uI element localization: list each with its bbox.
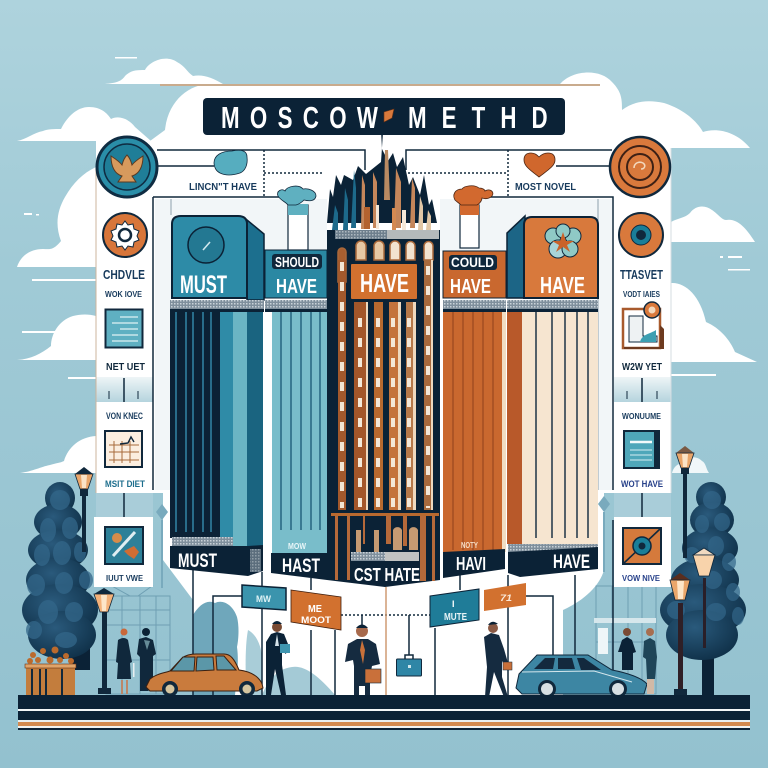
signpost: ME MOOT: ME [308,604,322,615]
label: VODT IAIES: VODT IAIES [623,290,661,299]
icon: book [624,431,659,468]
lamp post: right near tall [693,548,715,648]
label: WOK IOVE: WOK IOVE [105,290,143,299]
card: lower left item [94,517,153,587]
person: man right [618,628,636,670]
person: woman right [643,628,657,694]
tower: should have: SHOULD [275,255,319,271]
facade columns [338,260,433,510]
icon: orange spiral badge [610,137,670,197]
icon: briefcase [396,655,422,676]
signpost: ME MOOT: MOOT [301,615,331,626]
upper windows [338,241,433,282]
tower: should have [265,250,327,580]
label: VON KNEC: VON KNEC [106,411,143,421]
side panel: left list [94,137,257,587]
signpost: MW [242,585,286,610]
label: WONUUME: WONUUME [622,411,661,421]
tower: should have: HAST [282,556,320,577]
tower: should have: HAVE [276,276,317,298]
label: MOST NOVEL: MOST NOVEL [515,181,577,193]
roof block: MUST [180,271,227,299]
label: W2W YET: W2W YET [622,361,662,373]
have plate: HAVE [360,268,409,298]
right tree [660,482,746,696]
tower: should have: MOW [288,542,306,551]
icon: line chart [105,431,142,467]
have plate [351,264,417,299]
label: IUUT VWE: IUUT VWE [106,574,144,583]
signpost: I MUTE: I [452,599,455,609]
tower: could have [443,251,506,578]
title banner: METHD [408,100,548,135]
ground road [18,695,750,730]
icon: eagle badge [97,137,157,197]
card: lower right item [614,517,671,587]
lamp post: right far [676,446,694,558]
signpost: 71 [484,583,526,611]
title banner [203,98,565,135]
icon: picture frame [623,302,664,349]
tower: could have: COULD [451,254,494,270]
signpost: I MUTE: MUTE [444,612,467,623]
person: central man with bag [345,624,381,698]
icon: blue cloud bubble [214,150,247,175]
tower: could have: NOTY [461,541,478,550]
tower: could have: HAVI [456,554,486,574]
top divider line [160,84,600,86]
tower: have: HAVE [540,272,585,298]
label: TTASVET: TTASVET [620,267,663,282]
signpost: 71: 71 [500,593,512,603]
icon: orange chimney cloud [454,186,493,248]
side panel: right list [515,137,671,587]
left tree [22,482,98,670]
label: LINCN'T HAVE: LINCN"T HAVE [189,181,257,193]
icon: flower emblem [545,224,581,258]
label: CHDVLE: CHDVLE [103,267,145,282]
planter with fruit [25,646,76,695]
tower base arcade: CST HATE [354,565,420,585]
tower: must have [170,216,264,576]
spires [327,112,437,230]
label: WOT HAVE: WOT HAVE [621,479,663,490]
icon: orange gear badge [103,213,147,257]
icon: flag [384,109,394,122]
lamp post: left near [94,588,114,694]
tower: have [507,216,598,577]
roof block [172,216,264,300]
tower: have: HAVE [553,552,590,573]
lamp post: left far [75,467,93,552]
car: orange [146,654,263,697]
icon: document [106,310,142,348]
panel inner tint [155,199,612,490]
title banner: MOSCOW [221,100,378,135]
label: NET UET: NET UET [106,361,146,373]
diagram connector lines [96,148,671,695]
lamp post: right near [670,573,690,695]
signpost: I MUTE [430,589,479,627]
person: man with bag [266,621,290,695]
central tower [327,109,440,587]
person: woman left [116,628,134,694]
label: MSIT DIET: MSIT DIET [105,479,145,490]
icon: heart [524,153,555,177]
tower: could have: HAVE [450,276,491,298]
icon: orange ring badge [619,213,663,257]
tower body stripes [170,312,263,550]
signpost: ME MOOT [291,590,341,630]
icon: blue chimney cloud [278,186,316,250]
car: blue estate [516,655,647,698]
person: man with phone [484,622,512,697]
tower base arcade [331,513,439,585]
panel gaps [96,377,671,517]
tower: must have: MUST [178,551,217,572]
label: VOW NIVE: VOW NIVE [622,573,660,583]
person: man left [137,628,156,691]
distant scenery [106,496,656,695]
signpost: MW: MW [256,594,271,604]
